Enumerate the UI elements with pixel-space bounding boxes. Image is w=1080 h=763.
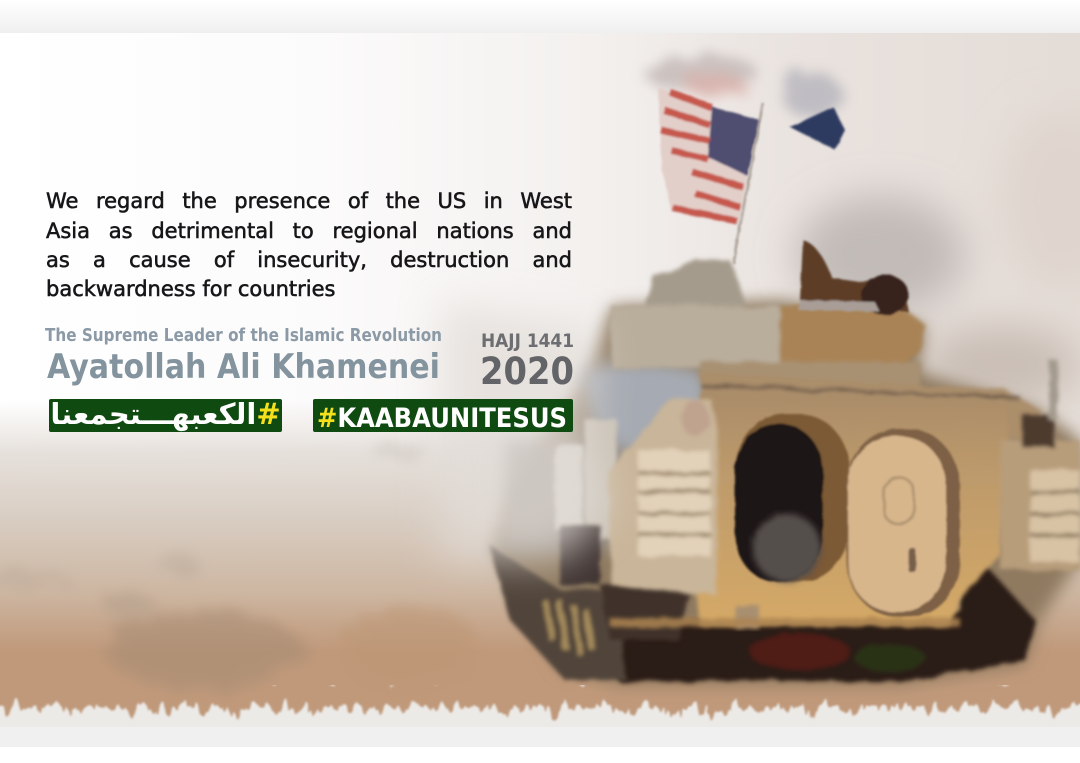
left haze over vehicle	[440, 300, 610, 560]
Hajj year: HAJJ 1441	[481, 330, 574, 352]
smoke haze	[795, 110, 1080, 405]
tow hooks	[610, 605, 960, 629]
tracks and road wheels	[490, 525, 690, 680]
base body mass	[490, 300, 1080, 685]
open door	[846, 429, 960, 617]
turret top and hull roof	[612, 260, 1040, 440]
Gregorian year: 2020	[480, 350, 574, 393]
role line: The Supreme Leader of the Islamic Revolution	[45, 325, 442, 346]
quote text: backwardness for countries	[46, 277, 335, 301]
right step ladder	[1000, 360, 1080, 570]
open hatch doorway	[735, 414, 850, 582]
quote text: Asia as detrimental to regional nations and	[46, 219, 572, 243]
name line: Ayatollah Ali Khamenei	[47, 347, 440, 387]
quote text: as a cause of insecurity, destruction and	[46, 248, 572, 272]
scrub patches on the ground	[0, 444, 480, 695]
armoured vehicle	[440, 240, 1080, 685]
left faded hull	[505, 361, 715, 550]
rear hull plate	[690, 392, 1010, 625]
US flag and pole	[658, 87, 763, 263]
shadow under hull	[600, 550, 1035, 682]
left step ladder	[608, 398, 718, 595]
quote text	[46, 189, 572, 301]
left armour panels	[555, 420, 617, 540]
quote text: We regard the presence of the US in West	[46, 189, 572, 213]
soldier on turret	[798, 240, 909, 315]
second dark flag	[790, 107, 845, 150]
